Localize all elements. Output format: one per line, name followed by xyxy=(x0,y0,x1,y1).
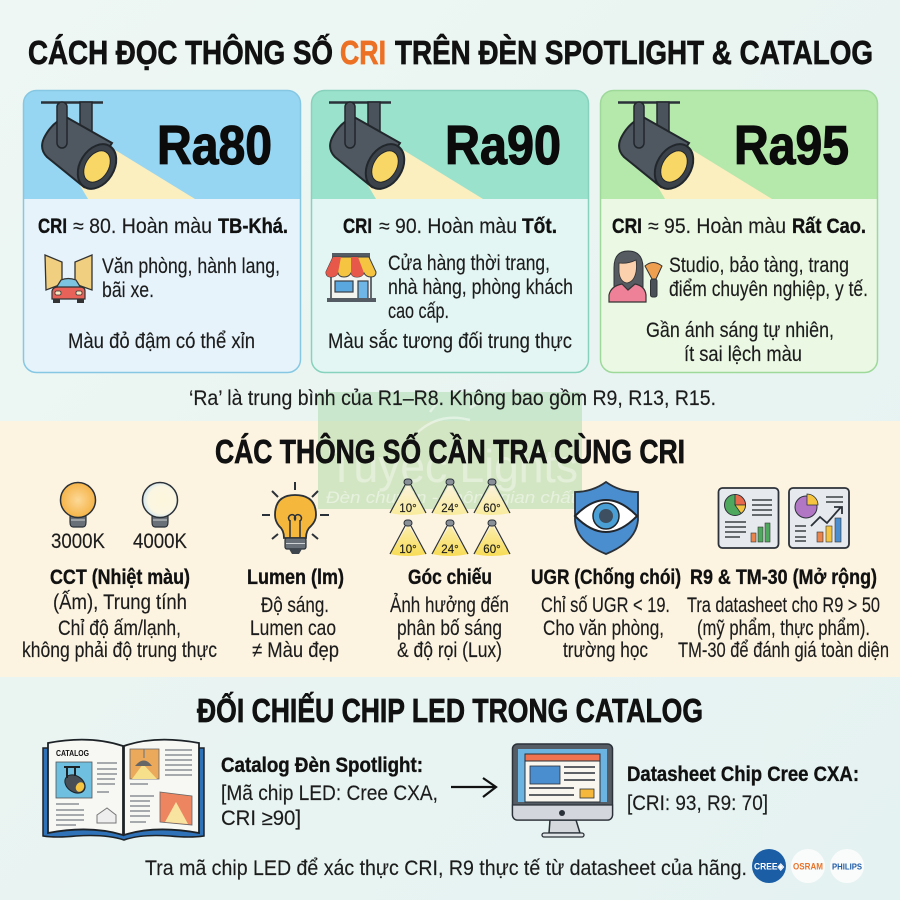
note xyxy=(646,319,834,366)
use cases text xyxy=(669,254,868,301)
icon: light bulb xyxy=(262,482,329,554)
CRI rating line xyxy=(343,215,557,238)
title: CÁCH ĐỌC THÔNG SỐ xyxy=(28,33,333,71)
column: UGR xyxy=(531,482,681,662)
column: CCT: (Ấm), Trung tính xyxy=(53,591,187,614)
panel: Ra80 xyxy=(24,90,300,372)
column: R9 and TM-30 xyxy=(678,488,889,662)
icon: beam angle grid: 24° xyxy=(441,503,459,515)
CRI rating line xyxy=(38,215,288,238)
note: Màu sắc tương đối trung thực xyxy=(328,330,572,353)
use cases text xyxy=(102,255,280,302)
column: beam angle xyxy=(390,479,510,662)
text: catalog spec xyxy=(221,754,438,830)
icon: spotlight xyxy=(329,102,483,199)
column: beam angle: & độ rọi (Lux) xyxy=(397,639,502,662)
CRI rating line: CRI xyxy=(612,215,642,238)
column: Lumen: Độ sáng. xyxy=(261,594,329,617)
heading: Ra80: Ra80 xyxy=(157,114,272,176)
icon: beam angle grid xyxy=(390,479,510,556)
column: beam angle: Góc chiếu xyxy=(408,566,492,589)
CRI rating line: CRI xyxy=(343,215,372,238)
watermark xyxy=(318,392,582,509)
use cases text: Cửa hàng thời trang, xyxy=(388,252,550,275)
column: CCT: Chỉ độ ấm/lạnh, xyxy=(58,617,181,640)
beige parameters band xyxy=(0,421,900,677)
column: beam angle: Ảnh hưởng đến xyxy=(390,594,509,617)
use cases text: bãi xe. xyxy=(102,279,154,302)
icon: shield with eye xyxy=(575,482,638,554)
text: datasheet spec: Datasheet Chip Cree CXA: xyxy=(627,763,859,786)
logo: Osram: OSRAM xyxy=(793,862,823,872)
title xyxy=(28,33,873,71)
CRI rating line xyxy=(612,215,866,238)
heading: parameters: CÁC THÔNG SỐ CẦN TRA CÙNG CRI xyxy=(215,432,685,470)
panel: Ra95 xyxy=(600,90,878,372)
icon: spotlight xyxy=(618,102,772,199)
column: UGR: Cho văn phòng, xyxy=(543,617,664,640)
column: CCT: 4000K xyxy=(133,530,187,553)
column: UGR: UGR (Chống chói) xyxy=(531,566,681,589)
use cases text: Văn phòng, hành lang, xyxy=(102,255,280,278)
text: catalog spec: Catalog Đèn Spotlight: xyxy=(221,754,423,777)
heading: Ra95: Ra95 xyxy=(734,114,849,176)
watermark: Tuyec Lights xyxy=(328,440,578,492)
icon: monitor with datasheet xyxy=(512,744,612,837)
use cases text xyxy=(388,252,573,323)
column: Lumen: ≠ Màu đẹp xyxy=(252,639,339,662)
icon: warm bulb xyxy=(60,482,96,527)
watermark: Đèn chuyên - không gian chất xyxy=(326,488,577,507)
column: beam angle: phân bố sáng xyxy=(397,617,502,640)
CRI rating line: ≈ 80. Hoàn màu xyxy=(73,215,212,238)
icon: neutral bulb xyxy=(142,482,178,527)
logo: Philips xyxy=(830,849,864,883)
column: CCT: CCT (Nhiệt màu) xyxy=(50,566,190,589)
panel: Ra90 xyxy=(312,90,588,372)
logo: Cree xyxy=(752,849,786,883)
CRI rating line: TB-Khá. xyxy=(218,215,288,238)
column: UGR: Chỉ số UGR < 19. xyxy=(541,594,670,617)
arrow xyxy=(451,778,496,797)
CRI rating line: ≈ 95. Hoàn màu xyxy=(648,215,786,238)
heading: Ra90: Ra90 xyxy=(445,114,561,176)
Ra definition note: ‘Ra’ là trung bình của R1–R8. Không bao gồm R9, R13, R15. xyxy=(189,387,716,410)
column: Lumen: Lumen cao xyxy=(250,617,336,640)
column: CCT: 3000K xyxy=(51,530,105,553)
note: Gần ánh sáng tự nhiên, xyxy=(646,319,834,342)
CRI rating line: ≈ 90. Hoàn màu xyxy=(379,215,517,238)
column: CCT: không phải độ trung thực xyxy=(22,639,217,662)
icon: beam angle grid: 60° xyxy=(483,503,501,515)
use cases text: nhà hàng, phòng khách xyxy=(388,276,573,299)
icon: beam angle grid: 10° xyxy=(399,544,417,556)
CRI rating line: Tốt. xyxy=(522,215,557,238)
use cases text: Studio, bảo tàng, trang xyxy=(669,254,849,277)
icon: car in corridor xyxy=(45,255,92,303)
title: CRI xyxy=(340,34,386,71)
column: Lumen: Lumen (lm) xyxy=(247,566,344,589)
bottom note: Tra mã chip LED để xác thực CRI, R9 thực tế từ datasheet của hãng. xyxy=(145,857,747,880)
icon: shop xyxy=(326,253,376,302)
text: catalog spec: CRI ≥90] xyxy=(221,807,301,830)
heading: catalog comparison: ĐỐI CHIẾU CHIP LED TRONG CATALOG xyxy=(197,691,703,729)
logo: Cree: CREE◈ xyxy=(754,862,785,872)
icon: beam angle grid: 10° xyxy=(399,503,417,515)
logo: Osram xyxy=(791,849,825,883)
icon: open catalog xyxy=(43,740,204,840)
CRI rating line: CRI xyxy=(38,215,67,238)
column: CCT xyxy=(22,482,217,662)
icon: spotlight xyxy=(41,102,195,199)
text: datasheet spec xyxy=(627,763,859,815)
text: catalog spec: [Mã chip LED: Cree CXA, xyxy=(221,782,438,805)
text: datasheet spec: [CRI: 93, R9: 70] xyxy=(627,792,768,815)
icon: beam angle grid: 24° xyxy=(441,544,459,556)
note: ít sai lệch màu xyxy=(684,343,802,366)
column: Lumen xyxy=(247,482,344,662)
icon: beam angle grid: 60° xyxy=(483,544,501,556)
logo: Philips: PHILIPS xyxy=(832,862,862,872)
note: Màu đỏ đậm có thể xỉn xyxy=(68,330,255,353)
icon: woman with makeup brush xyxy=(609,251,662,302)
use cases text: cao cấp. xyxy=(388,300,449,323)
column: UGR: trường học xyxy=(563,639,648,662)
icon: datasheet reports xyxy=(718,488,849,548)
icon: open catalog: CATALOG xyxy=(56,749,89,758)
CRI rating line: Rất Cao. xyxy=(792,215,866,238)
